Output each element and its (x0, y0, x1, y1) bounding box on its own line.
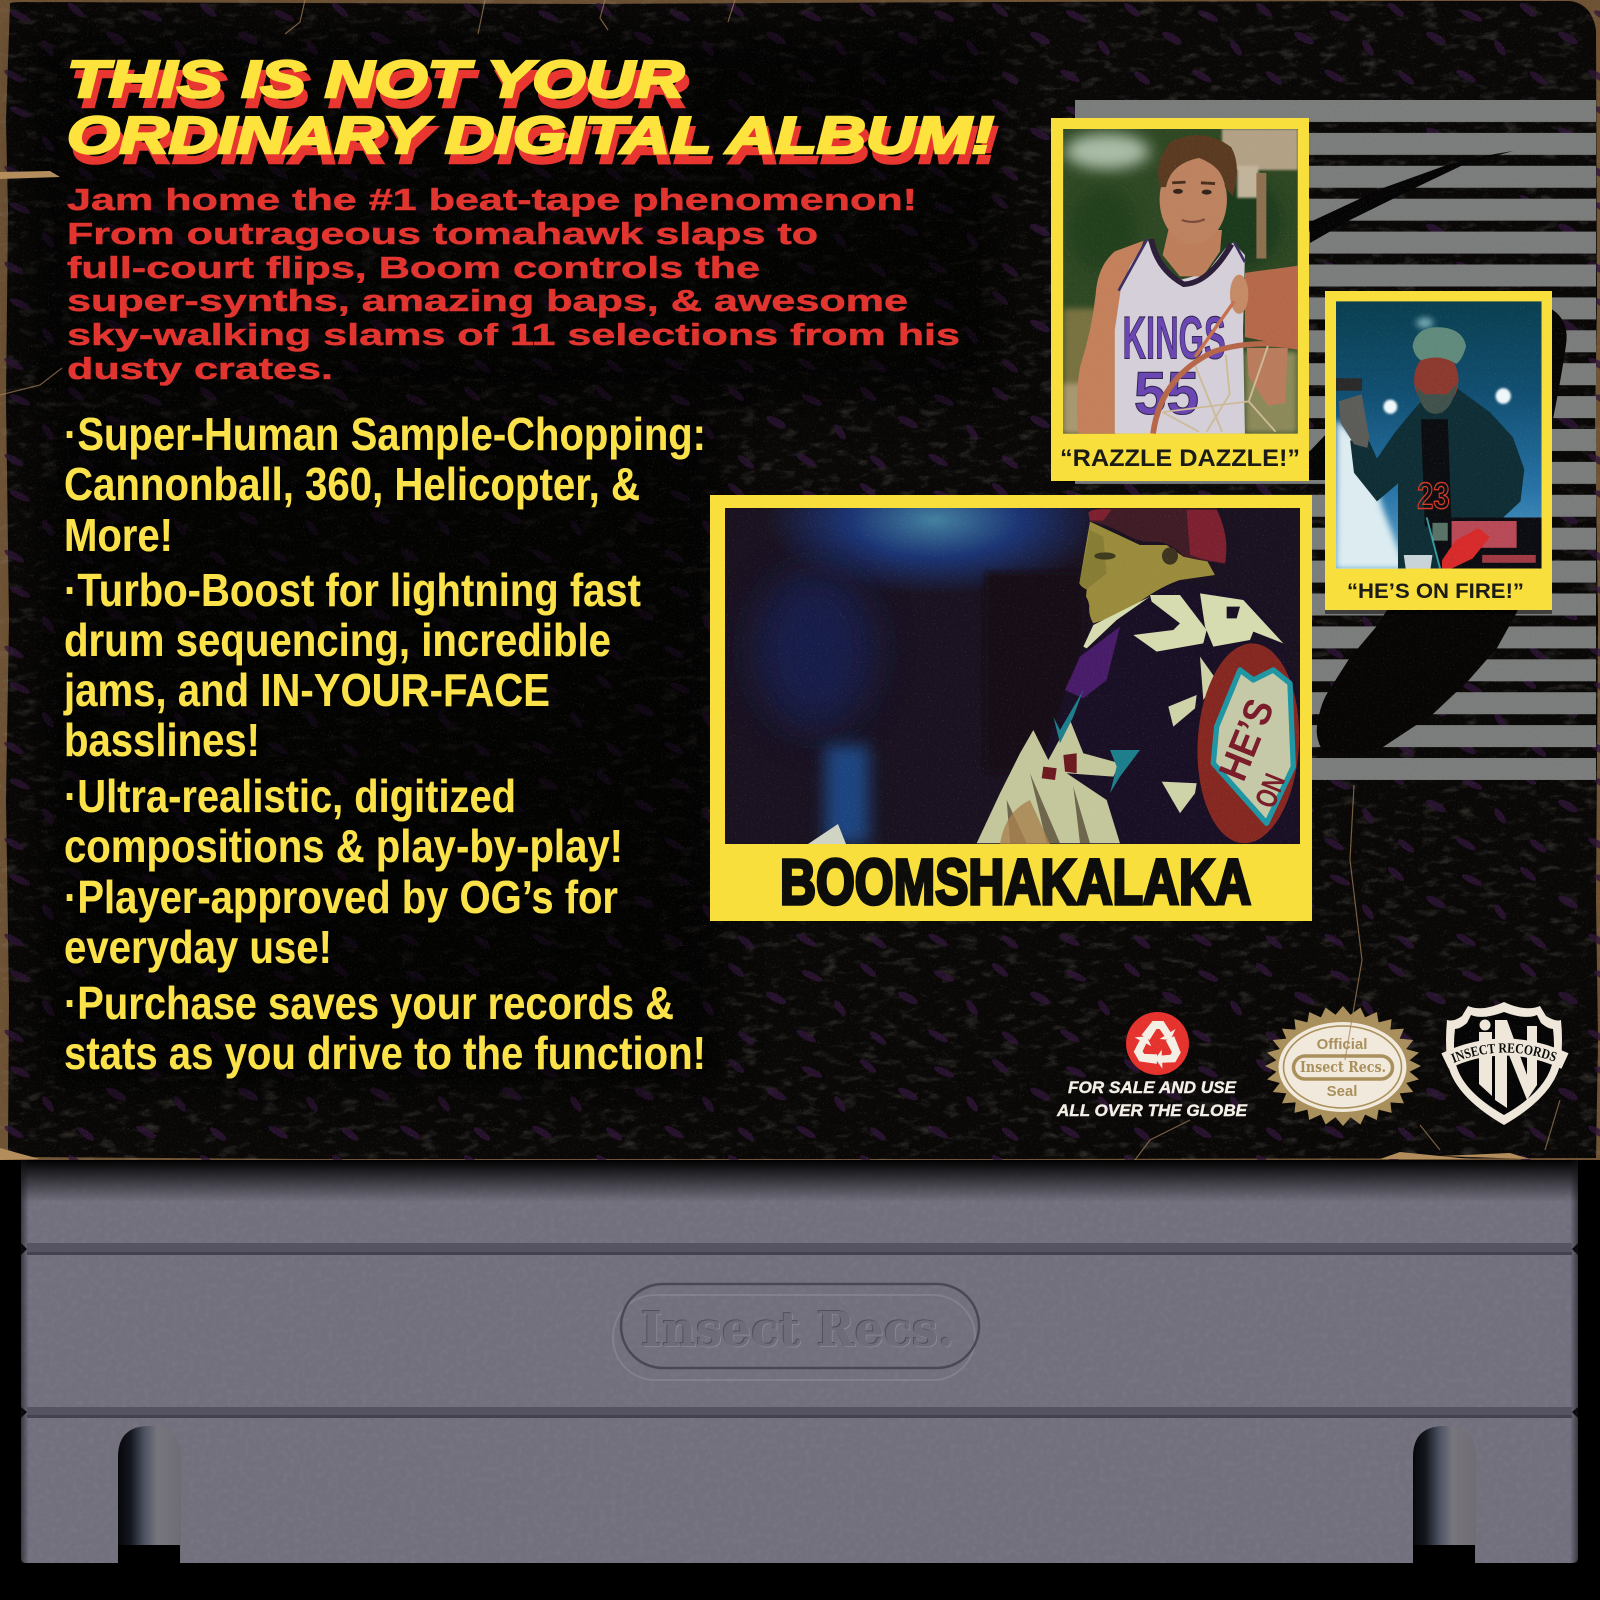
feature: ultra realistic (64, 770, 623, 872)
photo: man in jersey jacket: HE’S (1211, 693, 1283, 787)
icon: official seal (1265, 1006, 1421, 1126)
stripe panel with black swoosh (1075, 100, 1596, 780)
groove: lower (27, 1407, 1572, 1418)
caption: “RAZZLE DAZZLE!” (1060, 445, 1300, 472)
feature: turbo boost: drum sequencing, incredible (64, 614, 611, 666)
title (67, 51, 998, 175)
jacket cream pieces (1162, 657, 1217, 813)
swoosh (1310, 151, 1513, 243)
intro paragraph (67, 182, 960, 386)
feature: purchase saves: ·Purchase saves your records & (64, 977, 674, 1029)
title: ORDINARY DIGITAL ALBUM! (67, 107, 994, 165)
photo: player with hoop: 55 (1134, 360, 1199, 427)
photo card: he's on fire (1325, 291, 1552, 614)
collar (1083, 597, 1150, 648)
photo: man in jersey jacket (725, 508, 1300, 844)
feature: purchase saves: stats as you drive to the function! (64, 1027, 706, 1079)
jacket (1045, 647, 1089, 776)
feature: player approved: everyday use! (64, 921, 332, 973)
feature: sample chopping: More! (64, 509, 173, 561)
star and sleeve (977, 720, 1120, 843)
ribbon (1445, 1047, 1565, 1061)
feature: player approved (64, 871, 618, 973)
intro paragraph: super-synths, amazing baps, & awesome (67, 283, 908, 318)
feature: sample chopping: Cannonball, 360, Helicopter, & (64, 458, 640, 510)
photo: player with hoop: KINGS (1122, 305, 1226, 372)
embossed logo: Insect Recs. (642, 1303, 955, 1359)
intro paragraph: sky-walking slams of 11 selections from his (67, 317, 960, 352)
artist name: BOOMSHAKALAKA (780, 846, 1251, 918)
right notch (1413, 1426, 1476, 1563)
feature: turbo boost (63, 564, 641, 766)
embossed logo (613, 1284, 979, 1380)
intro paragraph: full-court flips, Boom controls the (67, 250, 760, 285)
icon: official seal: Official (1317, 1036, 1367, 1053)
purple sleeve (1065, 627, 1120, 698)
embossed logo: Insect Recs. (640, 1301, 953, 1357)
recycling caption: ALL OVER THE GLOBE (1056, 1102, 1248, 1120)
icon: recycling badge (1126, 1012, 1189, 1075)
recycling caption: FOR SALE AND USE (1068, 1079, 1237, 1097)
recycling caption (1056, 1079, 1248, 1120)
feature: turbo boost: basslines! (64, 714, 260, 766)
icon: official seal: Insect Recs. (1300, 1059, 1386, 1076)
feature: player approved: ·Player-approved by OG’s for (64, 871, 618, 923)
photo card: razzle dazzle (1051, 118, 1309, 481)
feature: turbo boost: ·Turbo-Boost for lightning fast (64, 564, 641, 616)
intro paragraph: Jam home the #1 beat-tape phenomenon! (67, 182, 917, 217)
photo: DJ at sampler: 23 (1417, 476, 1450, 517)
title: THIS IS NOT YOUR (71, 61, 689, 119)
icon: insect records shield: INSECT RECORDS (1450, 1043, 1557, 1063)
title: THIS IS NOT YOUR (67, 51, 685, 109)
photo card: boomshakalaka (710, 495, 1312, 921)
letters (1133, 595, 1207, 652)
feature: purchase saves (64, 977, 706, 1079)
title: ORDINARY DIGITAL ALBUM! (71, 117, 998, 175)
card wear texture (0, 0, 1600, 1167)
face (1079, 522, 1215, 623)
feature: sample chopping (64, 408, 706, 561)
worn tan card edge (0, 0, 1600, 1160)
caption: “HE’S ON FIRE!” (1347, 580, 1524, 603)
feature: ultra realistic: ·Ultra-realistic, digitized (64, 770, 516, 822)
intro paragraph: dusty crates. (67, 351, 333, 386)
panel: grey plastic cartridge (21, 1160, 1578, 1563)
intro paragraph: From outrageous tomahawk slaps to (67, 216, 818, 251)
feature: sample chopping: ·Super-Human Sample-Chopping: (64, 408, 706, 460)
icon: insect records shield (1441, 1002, 1568, 1125)
cracks and scuffs (0, 0, 1560, 1160)
photo: man in jersey jacket: ON (1249, 769, 1292, 813)
embossed logo: Insect Recs. (641, 1302, 954, 1358)
cap (1088, 508, 1226, 563)
panel: cartridge label card (0, 0, 1600, 1160)
patch (1197, 643, 1300, 844)
groove: upper (27, 1243, 1572, 1255)
left notch (118, 1426, 181, 1563)
dark text vignette (30, 30, 1000, 400)
feature: ultra realistic: compositions & play-by-play! (64, 820, 623, 872)
feature: turbo boost: jams, and IN-YOUR-FACE (63, 664, 550, 716)
icon: official seal: Seal (1327, 1083, 1357, 1100)
feature list (63, 408, 706, 1079)
photo: DJ at sampler (1336, 301, 1542, 569)
photo: player with hoop (1063, 129, 1298, 434)
